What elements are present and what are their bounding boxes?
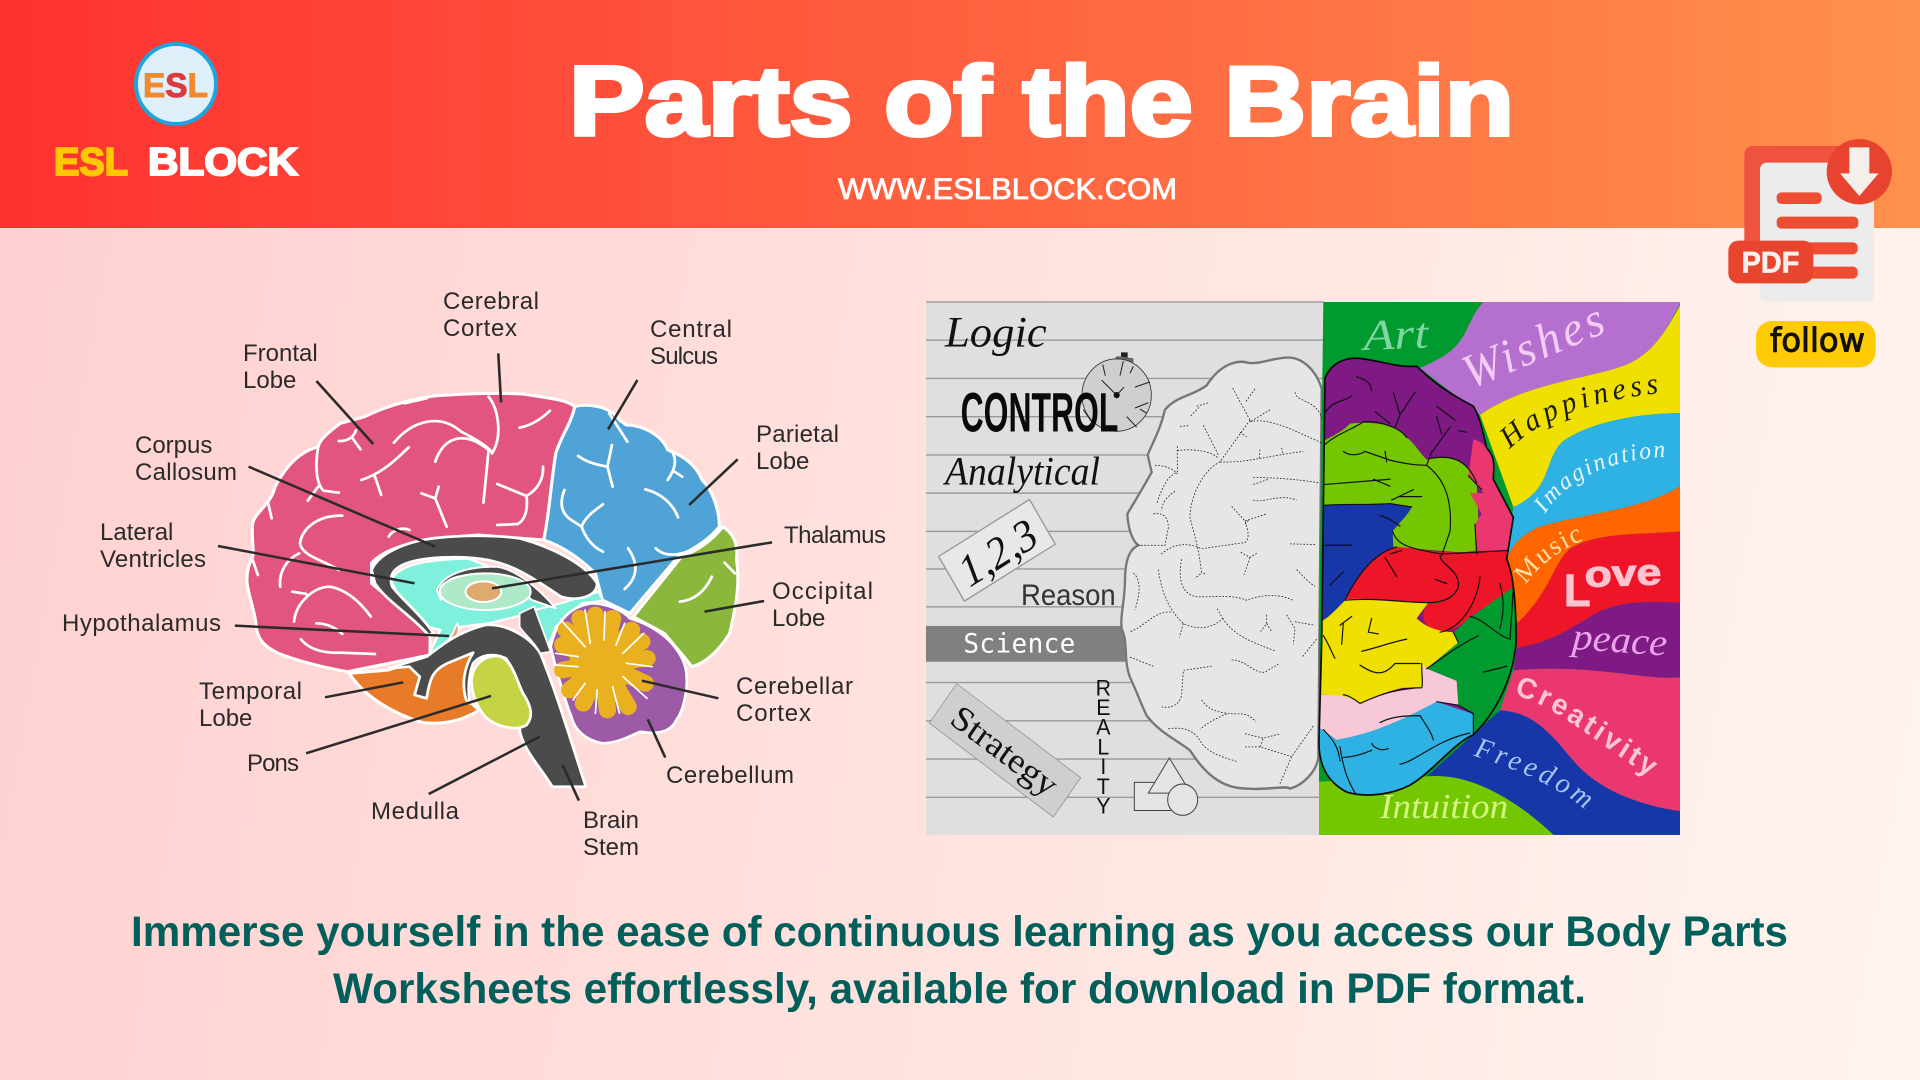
anatomy labels: Lobe xyxy=(772,605,825,632)
anatomy labels: Cerebral xyxy=(443,288,539,315)
title: Parts of the Brain xyxy=(569,46,1514,156)
website url: WWW.ESLBLOCK.COM xyxy=(838,173,1177,206)
word: Love: L xyxy=(1564,566,1590,616)
call to action text: Worksheets effortlessly, available for download in PDF format. xyxy=(333,965,1586,1013)
frontal lobe and cerebral cortex xyxy=(247,393,575,672)
brain stem xyxy=(389,625,586,787)
anatomy labels: Ventricles xyxy=(100,546,206,573)
anatomy labels: Thalamus xyxy=(784,522,886,549)
cerebellum xyxy=(551,603,687,743)
ventricles xyxy=(390,558,556,653)
science band: Science xyxy=(963,628,1075,659)
icon: geometric shapes xyxy=(1134,758,1198,815)
word: Logic: Logic xyxy=(944,309,1047,357)
icon: stopwatch xyxy=(1082,352,1151,431)
pdf download icon xyxy=(1728,139,1892,302)
anatomy labels: Central xyxy=(650,316,732,343)
pons xyxy=(471,656,531,728)
parietal lobe xyxy=(544,405,719,613)
brain anatomy diagram xyxy=(62,288,886,861)
anatomy labels: Cortex xyxy=(736,700,811,727)
occipital lobe xyxy=(633,527,738,667)
word: Analytical: Analytical xyxy=(942,450,1100,494)
header banner xyxy=(0,0,1920,228)
logo: ESL Block: BLOCK xyxy=(148,141,298,184)
thalamus xyxy=(440,573,531,610)
anatomy labels: Occipital xyxy=(772,578,873,605)
anatomy labels: Lateral xyxy=(100,519,173,546)
anatomy labels: Lobe xyxy=(243,367,296,394)
anatomy labels: Cortex xyxy=(443,315,517,342)
thalamus surround xyxy=(437,567,556,608)
word: Reason: Reason xyxy=(1021,580,1116,612)
colourful brain hemisphere xyxy=(1318,357,1517,796)
anatomy labels: Lobe xyxy=(756,448,809,475)
word: Creativity: Creativity xyxy=(1518,678,1658,776)
call to action text xyxy=(131,908,1788,1013)
card: Strategy xyxy=(929,684,1081,817)
hypothalamus xyxy=(444,623,459,643)
word: Music: Music xyxy=(1513,529,1582,584)
logo: ESL Block: ESL xyxy=(54,141,128,184)
word: REALITY vertical: T xyxy=(1097,773,1110,799)
leader lines xyxy=(218,353,772,801)
word: Art: Art xyxy=(1359,310,1430,360)
anatomy labels: Temporal xyxy=(199,678,302,705)
word: Intuition: Intuition xyxy=(1379,789,1508,826)
word: Wishes: Wishes xyxy=(1455,293,1612,400)
anatomy labels: Medulla xyxy=(371,798,460,825)
temporal lobe xyxy=(349,653,479,723)
science band xyxy=(926,626,1129,662)
anatomy labels: Lobe xyxy=(199,705,252,732)
word: REALITY vertical: E xyxy=(1096,694,1110,720)
anatomy labels: Parietal xyxy=(756,421,839,448)
follow button xyxy=(1756,321,1876,367)
call to action text: Immerse yourself in the ease of continuous learning as you access our Body Parts xyxy=(131,908,1788,956)
cortical folds xyxy=(253,397,735,654)
corpus callosum xyxy=(372,536,597,635)
word: peace: peace xyxy=(1568,616,1669,665)
word: Freedom: Freedom xyxy=(1473,738,1591,809)
anatomy labels: Cerebellar xyxy=(736,673,853,700)
pdf download icon: PDF xyxy=(1742,247,1799,280)
logo: ESL Block xyxy=(54,44,298,184)
anatomy labels: Frontal xyxy=(243,340,318,367)
word: REALITY vertical: R xyxy=(1096,675,1111,701)
anatomy labels: Hypothalamus xyxy=(62,610,221,637)
anatomy labels: Corpus xyxy=(135,432,212,459)
follow button: follow xyxy=(1770,321,1865,360)
anatomy labels: Pons xyxy=(247,750,299,777)
anatomy labels: Sulcus xyxy=(650,343,718,370)
anatomy labels: Stem xyxy=(583,834,639,861)
word: REALITY vertical: Y xyxy=(1096,793,1111,819)
anatomy labels: Cerebellum xyxy=(666,762,794,789)
word: Love xyxy=(1564,552,1662,616)
cerebellar cortex xyxy=(556,610,652,713)
right edge brain outline, left hemisphere xyxy=(1121,358,1322,789)
word: REALITY vertical: A xyxy=(1096,714,1111,740)
word: CONTROL: CONTROL xyxy=(961,382,1118,444)
panel: right brain creativity xyxy=(1318,293,1680,835)
logo: ESL Block: ESL xyxy=(143,67,208,105)
card: 1,2,3: 1,2,3 xyxy=(950,509,1046,597)
word: REALITY vertical: L xyxy=(1097,734,1109,760)
colour bands xyxy=(1319,302,1680,835)
word: REALITY vertical xyxy=(1096,675,1111,819)
word: Happiness: Happiness xyxy=(1500,379,1657,450)
card: Strategy: Strategy xyxy=(944,698,1065,805)
panel: left brain logic xyxy=(926,302,1324,835)
anatomy labels xyxy=(62,288,886,861)
anatomy labels: Brain xyxy=(583,807,639,834)
word: REALITY vertical: I xyxy=(1100,754,1106,779)
anatomy labels: Callosum xyxy=(135,459,237,486)
word: Love: ove xyxy=(1584,552,1662,595)
word: Imagination: Imagination xyxy=(1534,444,1664,514)
